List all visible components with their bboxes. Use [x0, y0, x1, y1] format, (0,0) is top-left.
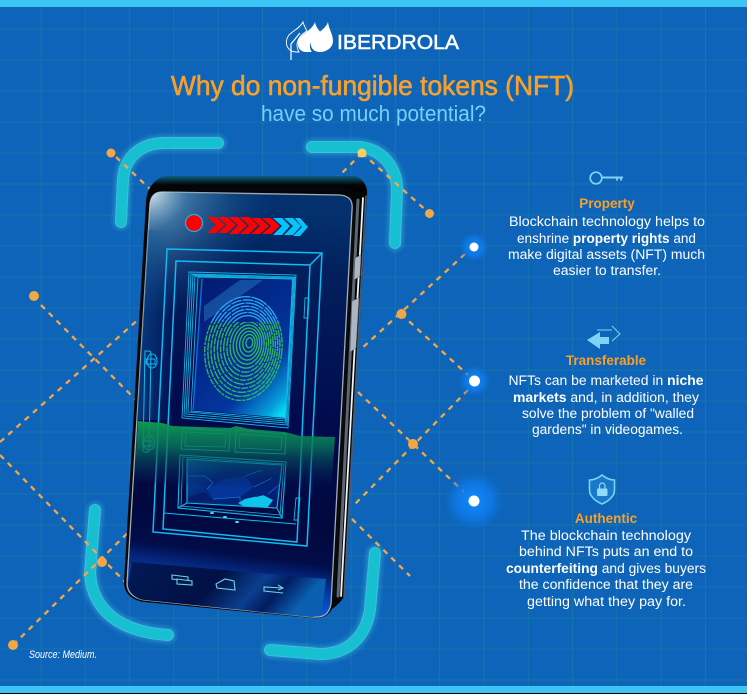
green scan band: [134, 421, 335, 492]
text: authentic: The blockchain technology: [521, 528, 691, 543]
text: property: make digital assets (NFT) much: [508, 247, 705, 262]
panels: [181, 428, 230, 451]
cyan corner brackets: [90, 143, 397, 654]
navigation bar: [128, 562, 326, 617]
source note: Source: Medium.: [29, 649, 97, 661]
icon: key: [590, 172, 623, 184]
nav icons: [172, 575, 283, 593]
screen highlight: [136, 192, 266, 420]
text: property: enshrine property rights and: [517, 231, 696, 246]
logo: Iberdrola: [286, 22, 460, 60]
window inner edge: [193, 279, 202, 410]
icon: shield with padlock: [590, 475, 614, 504]
panel: property: [508, 172, 705, 278]
icon: two arrows: [587, 326, 620, 349]
phone top edge: [150, 176, 367, 192]
text: property: [508, 214, 705, 278]
lower window: [178, 455, 290, 518]
door lights: [210, 512, 239, 523]
text: authentic: the confidence that they are: [519, 577, 693, 592]
progress indicator: [186, 214, 308, 236]
glass reflection: [204, 280, 263, 322]
title: Why do non-fungible tokens (NFT): [171, 70, 574, 101]
upper window frame: [182, 272, 296, 428]
text: authentic: counterfeiting and gives buyers: [506, 561, 706, 576]
dashed connector lines: [0, 153, 468, 645]
title: [171, 70, 574, 126]
text: transferable: solve the problem of "walled: [522, 406, 694, 421]
text: transferable: markets and, in addition, they: [513, 390, 699, 405]
wordmark: IBERDROLA: [337, 32, 460, 54]
panel: transferable: [508, 326, 704, 437]
panel: authentic: [506, 475, 706, 609]
text: authentic: getting what they pay for.: [527, 594, 686, 609]
smartphone: [124, 176, 367, 618]
text: authentic: [506, 528, 706, 609]
connector nodes: [8, 148, 434, 650]
icon: three leaves: [286, 22, 333, 60]
heading: transferable: Transferable: [566, 353, 647, 368]
upper window glass: [193, 279, 292, 418]
text: transferable: gardens" in videogames.: [532, 422, 683, 437]
fingerprint: [204, 296, 283, 402]
phone body: [124, 176, 367, 618]
screen: [127, 192, 352, 617]
glowing nodes: [440, 230, 508, 535]
text: property: easier to transfer.: [553, 263, 661, 278]
text: property: Blockchain technology helps to: [509, 214, 705, 229]
title: have so much potential?: [261, 101, 486, 126]
heading: authentic: Authentic: [575, 511, 638, 526]
text: transferable: [508, 373, 704, 437]
lock: [143, 351, 151, 452]
text: transferable: NFTs can be marketed in niche: [508, 373, 704, 388]
vault door: [143, 249, 322, 546]
text: authentic: behind NFTs puts an end to: [519, 544, 693, 559]
heading: property: Property: [579, 196, 635, 211]
side buttons: [350, 255, 361, 352]
phone side edge: [334, 196, 366, 600]
